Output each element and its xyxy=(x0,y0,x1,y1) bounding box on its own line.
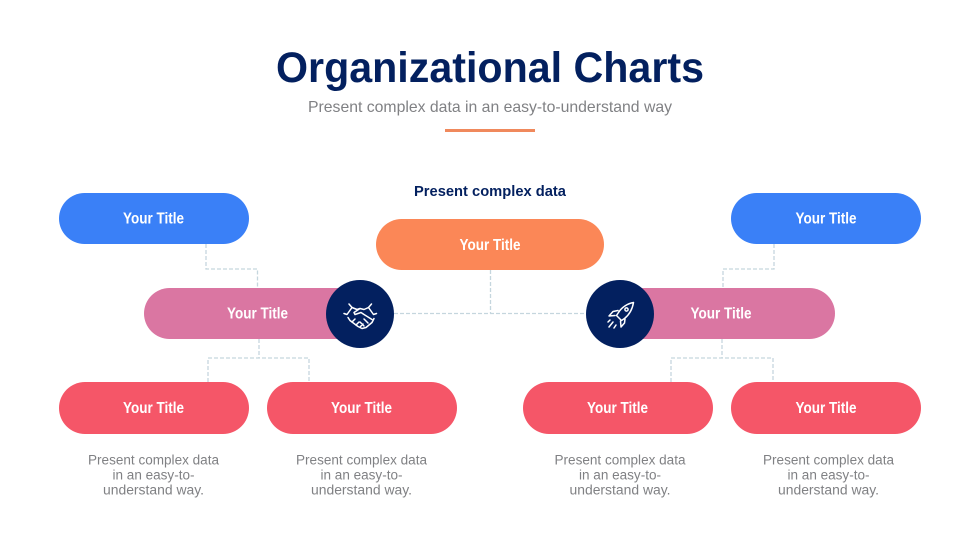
node: right pink: Your Title xyxy=(690,306,752,322)
node: center orange xyxy=(376,219,604,270)
node: lower right red 1: Your Title xyxy=(587,400,648,417)
accent divider xyxy=(445,129,535,132)
node: left pink xyxy=(144,288,370,339)
node: left pink: Your Title xyxy=(227,306,288,322)
node: top left blue xyxy=(59,193,249,244)
description 4: Present complex data xyxy=(763,452,894,468)
description 1: in an easy-to- xyxy=(112,468,194,482)
node: right pink xyxy=(609,288,835,339)
node: lower left red 2 xyxy=(267,382,457,434)
description 2: understand way. xyxy=(311,482,412,498)
node: lower left red 1 xyxy=(59,382,249,434)
node: top right blue: Your Title xyxy=(796,210,857,228)
node: top left blue: Your Title xyxy=(123,210,184,228)
description 3: understand way. xyxy=(570,482,670,498)
description 4: in an easy-to- xyxy=(788,468,870,482)
description 1: understand way. xyxy=(103,482,204,498)
description 2: in an easy-to- xyxy=(320,468,402,482)
node: lower left red 2: Your Title xyxy=(331,400,392,417)
description 1 xyxy=(88,452,219,498)
node: lower right red 2: Your Title xyxy=(796,400,857,417)
description 3 xyxy=(554,452,686,498)
node: lower right red 2 xyxy=(731,382,921,434)
description 3: in an easy-to- xyxy=(579,468,661,482)
chart heading: Present complex data xyxy=(414,184,567,200)
description 1: Present complex data xyxy=(88,452,219,468)
description 2: Present complex data xyxy=(296,452,427,468)
node: lower right red 1 xyxy=(523,382,713,434)
description 3: Present complex data xyxy=(554,452,686,468)
subtitle: Present complex data in an easy-to-understand way xyxy=(308,99,672,116)
icon: handshake xyxy=(326,280,394,348)
title: Organizational Charts xyxy=(276,44,704,92)
description 2 xyxy=(296,452,427,498)
description 4: understand way. xyxy=(778,482,879,498)
node: center orange: Your Title xyxy=(460,237,521,254)
node: top right blue xyxy=(731,193,921,244)
connector lines xyxy=(206,244,774,382)
icon: rocket xyxy=(586,280,654,348)
description 4 xyxy=(763,452,894,498)
node: lower left red 1: Your Title xyxy=(123,400,184,417)
